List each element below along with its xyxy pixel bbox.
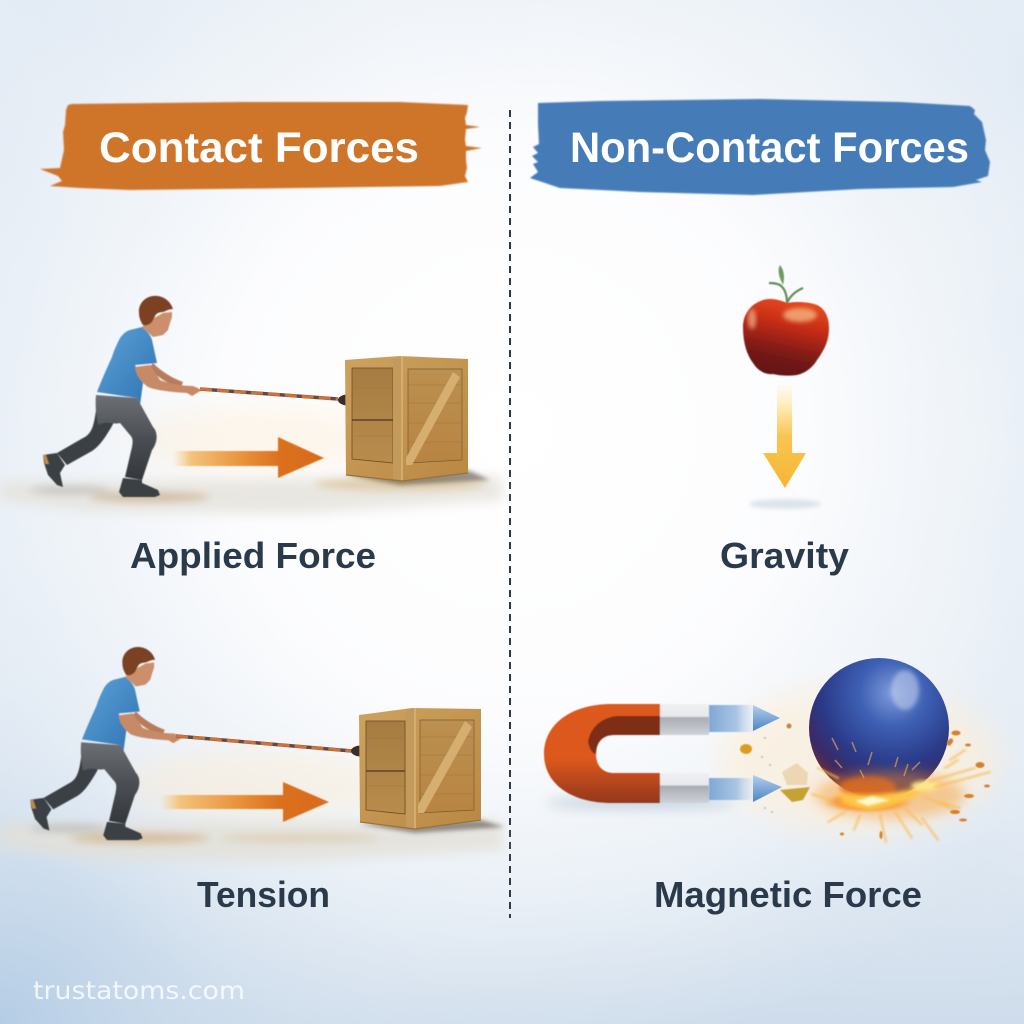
watermark: trustatoms.com: trustatoms.com: [33, 976, 245, 1005]
scene: applied force: [0, 296, 504, 514]
magnetic arrow: bottom: [709, 775, 782, 802]
shadow: [749, 499, 821, 509]
gold fragments: [740, 724, 810, 813]
label: Applied Force: Applied Force: [130, 535, 376, 576]
scene: gravity: [743, 265, 829, 509]
heading banner: Non-Contact Forces: [530, 99, 990, 195]
wooden crate: [345, 356, 490, 485]
person pulling rope: [43, 296, 202, 497]
person pulling rope: [30, 647, 183, 840]
orange arrow: [173, 437, 324, 478]
heading banner: Contact Forces: [40, 102, 482, 190]
wooden crate: [359, 708, 505, 833]
label: Magnetic Force: Magnetic Force: [654, 874, 922, 915]
magnet shadow: [545, 797, 735, 809]
magnetic arrow: top: [709, 705, 780, 732]
blue sphere: [809, 658, 949, 800]
ground and warm glow: [0, 750, 504, 862]
yellow gravity arrow: [763, 385, 806, 488]
rope: [176, 736, 380, 756]
scene: tension: [0, 647, 505, 862]
heading banner: Contact Forces: Contact Forces: [99, 124, 419, 172]
label: Tension: Tension: [197, 874, 330, 915]
ground and warm glow: [0, 405, 504, 514]
label: Gravity: Gravity: [720, 535, 849, 576]
rope: [200, 389, 367, 406]
orange arrow: [160, 782, 329, 822]
heading banner: Non-Contact Forces: Non-Contact Forces: [570, 124, 969, 172]
center dashed divider: [509, 110, 511, 918]
scene: magnetic force: [544, 658, 1000, 842]
warm haze: [720, 685, 1000, 835]
explosion and sparks: [812, 730, 990, 842]
horseshoe magnet: [544, 704, 709, 803]
apple: [743, 265, 829, 376]
